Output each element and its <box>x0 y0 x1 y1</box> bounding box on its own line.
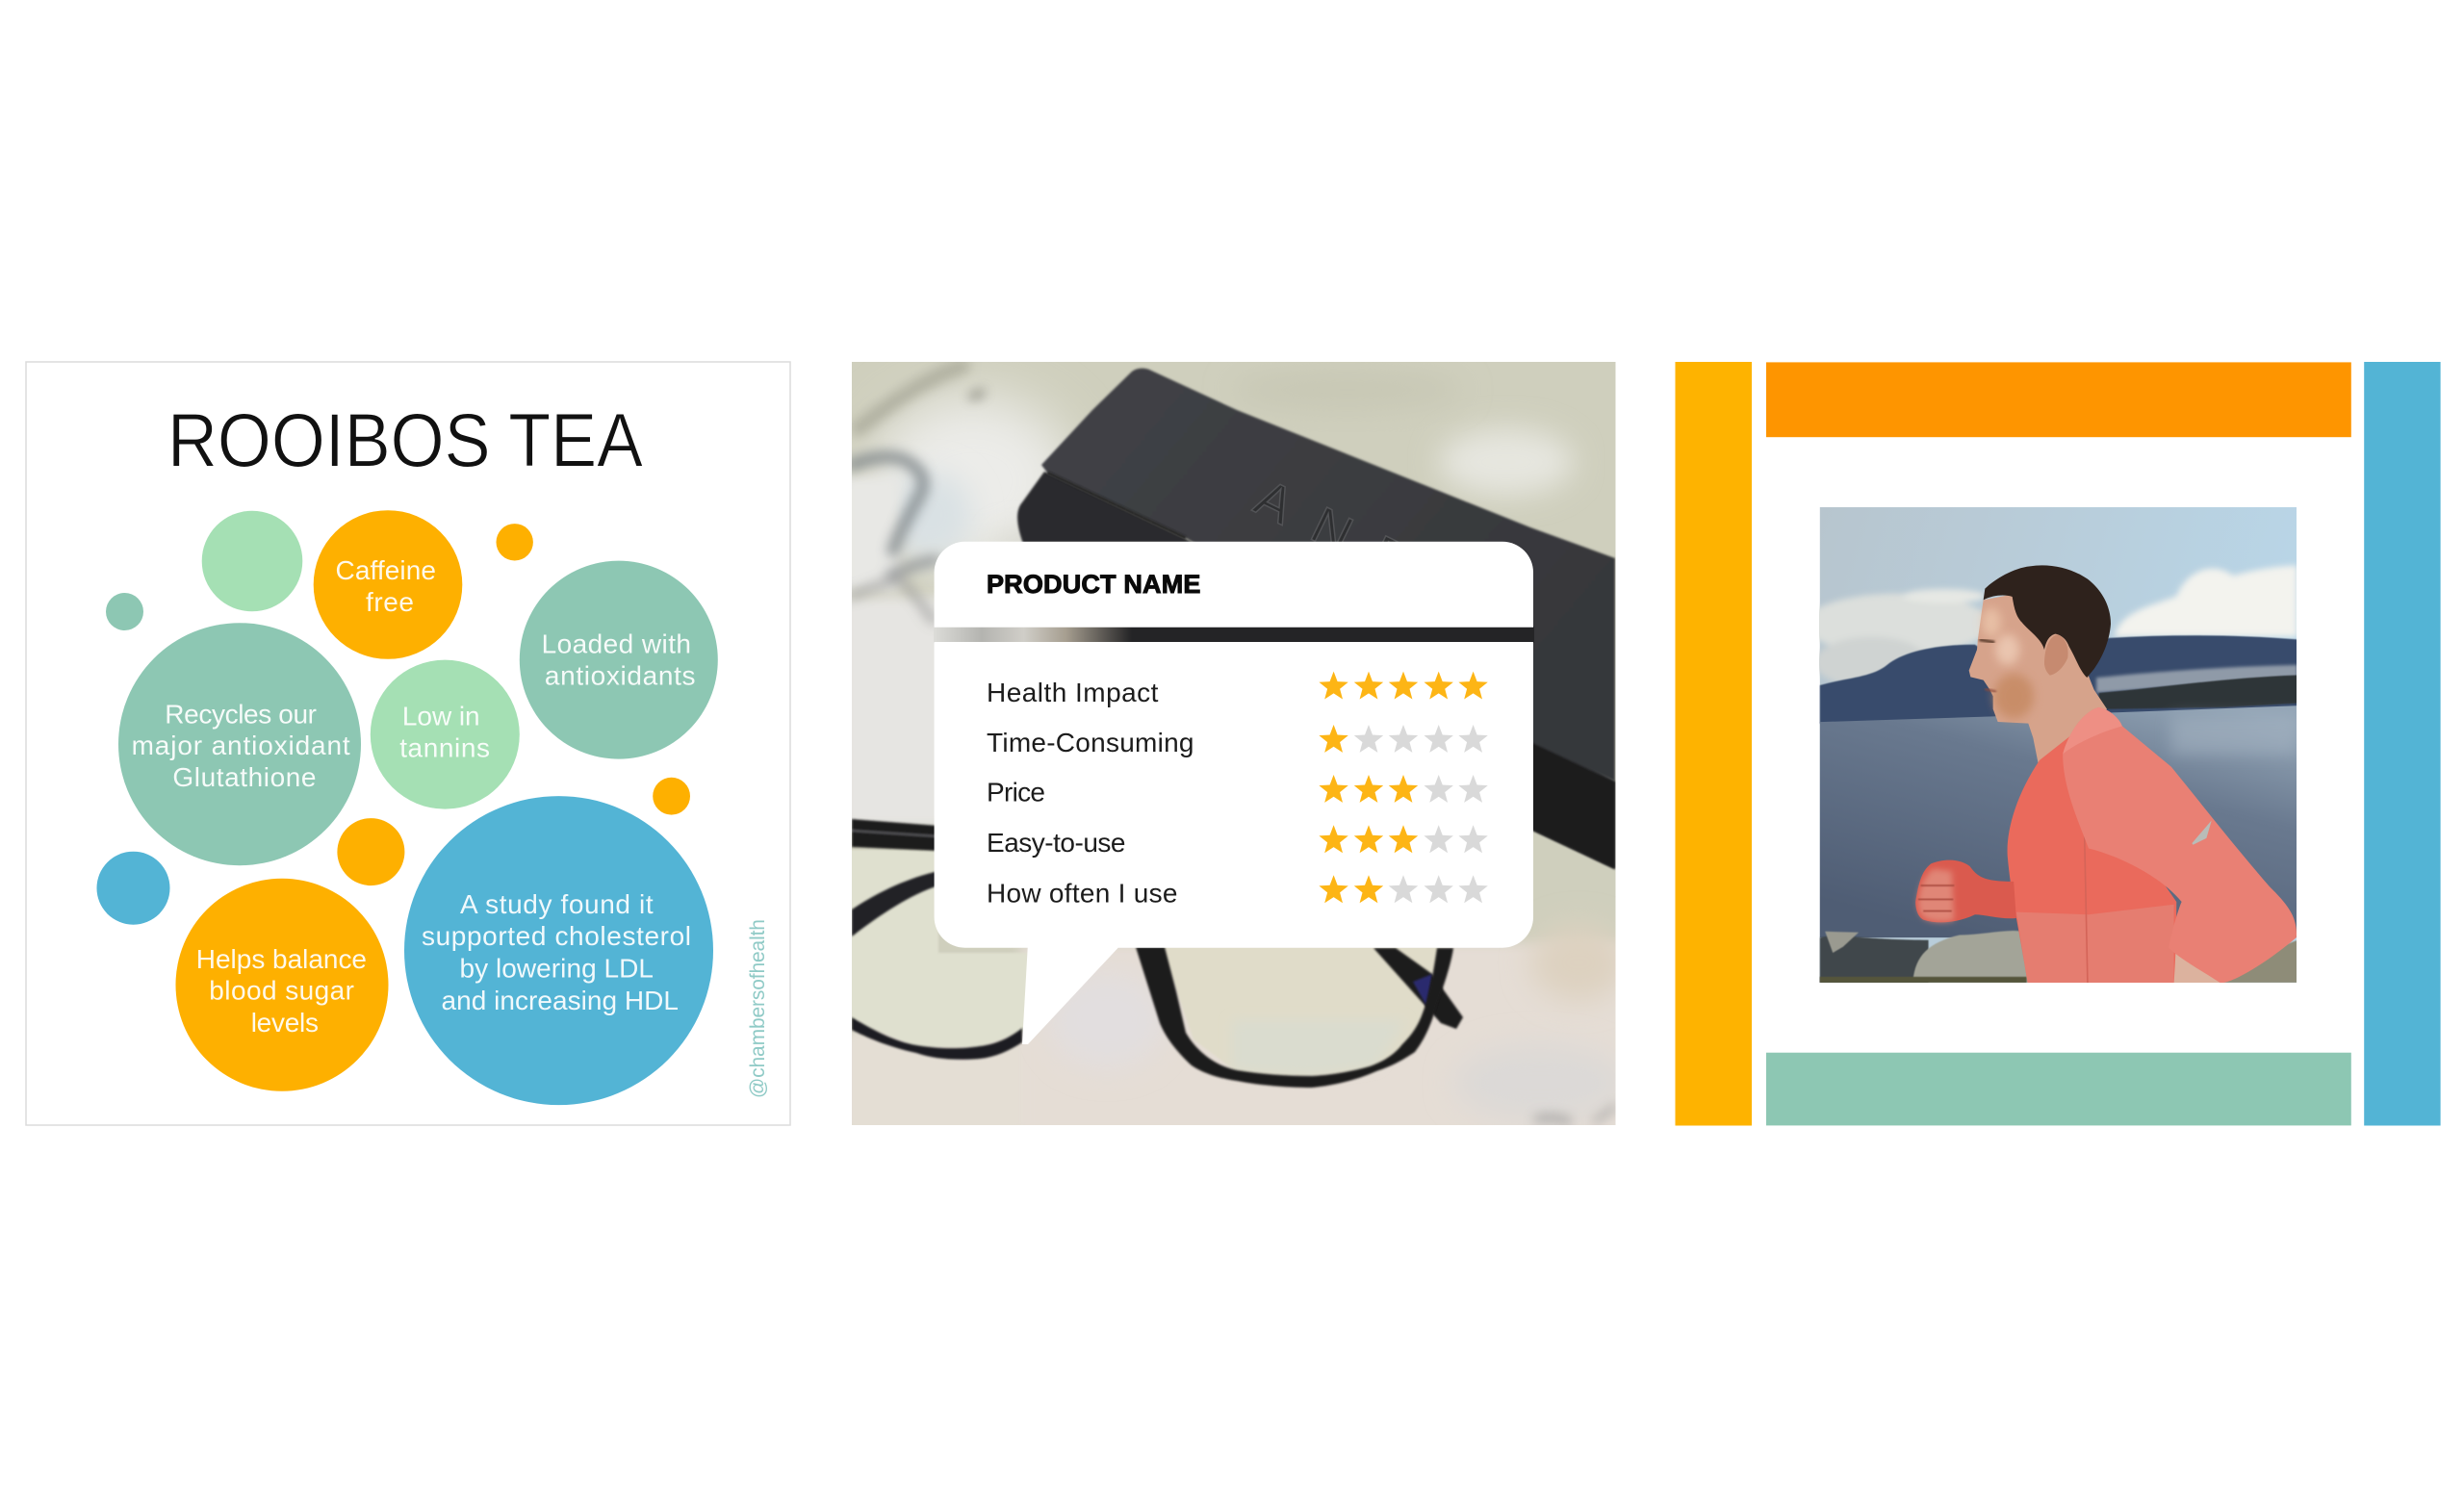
bubble: loaded with antioxidants <box>520 561 718 759</box>
bubble: caffeine free: Caffeine <box>335 555 436 585</box>
watermark handle: @chambersofhealth <box>747 919 769 1098</box>
row: price <box>987 775 1488 808</box>
lens tint left <box>852 850 1023 1031</box>
row: how often i use: How often I use <box>987 878 1178 909</box>
infographic: three square panels <box>25 361 2441 1126</box>
man head and neck <box>1969 565 2111 770</box>
row: easy-to-use <box>987 825 1488 858</box>
row: health impact: Health Impact <box>987 678 1159 707</box>
bubble: recycles glutathione: Glutathione <box>172 762 316 792</box>
bubble: helps balance blood sugar: blood sugar <box>209 976 354 1006</box>
forearm skin <box>2173 954 2220 983</box>
hand and wrist <box>1915 860 2016 922</box>
bubble: loaded with antioxidants: antioxidants <box>545 660 695 691</box>
bubble: caffeine free <box>314 510 462 659</box>
bubble: cholesterol study: supported cholesterol <box>422 921 691 951</box>
bubble: helps balance blood sugar: levels <box>251 1008 319 1038</box>
bubble: loaded with antioxidants: Loaded with <box>542 629 691 659</box>
bubble: small teal <box>106 593 143 630</box>
sleeve logo <box>2192 820 2212 845</box>
bubble: recycles glutathione <box>118 623 361 865</box>
row: how often i use <box>987 875 1488 909</box>
bubble: small orange top <box>497 524 533 560</box>
photo: runner by the water <box>1805 507 2297 983</box>
bubble: low in tannins <box>371 660 520 809</box>
water <box>1820 705 2297 937</box>
glasses case: ANDR <box>1246 469 1479 622</box>
frame bar: yellow <box>1675 362 1752 1126</box>
row: easy-to-use: Easy-to-use <box>987 828 1126 858</box>
bubble: cholesterol study: by lowering LDL <box>460 953 654 983</box>
torso <box>2008 713 2176 983</box>
strip visible through card gap <box>934 627 1534 643</box>
frame bar: teal <box>1766 1053 2351 1125</box>
photo: glasses on marble <box>842 362 1631 1136</box>
frame bar: blue <box>2364 362 2441 1126</box>
row: health impact <box>987 672 1488 707</box>
glasses case <box>1017 369 1615 869</box>
marble veins <box>852 366 1615 1121</box>
title: ROOIBOS TEA <box>167 397 643 483</box>
photo background <box>1805 507 2297 983</box>
panel: runner with colored frame <box>1675 362 2441 1126</box>
panel: rooibos tea bubbles <box>26 362 790 1125</box>
marble tones <box>842 369 1631 1136</box>
bubble: recycles glutathione: major antioxidant <box>132 731 350 760</box>
bubble: low in tannins: tannins <box>399 732 490 762</box>
bubble: cholesterol study: and increasing HDL <box>441 986 679 1015</box>
glasses frame right <box>1136 947 1453 1088</box>
bubble: cholesterol study: A study found it <box>460 889 654 919</box>
glasses temple right <box>1373 948 1463 1029</box>
panel: product rating card over photo <box>842 362 1631 1136</box>
lens tint right <box>1167 949 1436 1064</box>
bubble: recycles glutathione: Recycles our <box>165 699 317 729</box>
bubble: helps balance blood sugar: Helps balance <box>196 944 367 974</box>
bubble: cholesterol study <box>404 796 713 1105</box>
bubble: decorative light green <box>202 511 302 611</box>
card heading: PRODUCT NAME <box>987 570 1200 599</box>
rating card <box>935 542 1533 1044</box>
bubble: small orange right <box>653 778 690 815</box>
row: price: Price <box>987 778 1045 808</box>
mountains <box>1820 635 2297 724</box>
row: time-consuming: Time-Consuming <box>987 728 1194 757</box>
bubble: medium orange <box>337 818 404 885</box>
bubble: caffeine free: free <box>366 587 414 617</box>
frame bar: orange <box>1766 362 2351 437</box>
glasses frame left <box>852 819 1022 1060</box>
bubble: blue left <box>96 852 169 925</box>
row: time-consuming <box>987 725 1488 757</box>
man body <box>1915 707 2297 983</box>
bubble: helps balance blood sugar <box>175 879 389 1091</box>
bubble: low in tannins: Low in <box>402 702 480 731</box>
shoulder and arm <box>2063 707 2297 983</box>
rocks <box>1820 936 1929 983</box>
